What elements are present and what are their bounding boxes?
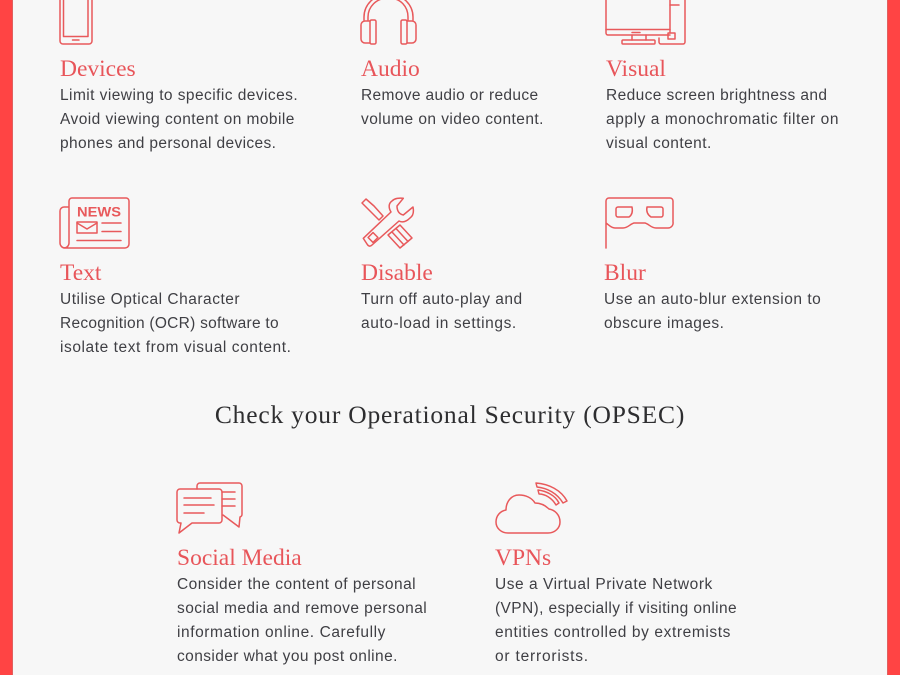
text: devices: phones and personal devices. xyxy=(60,134,276,152)
heading: disable: Disable xyxy=(361,260,433,286)
panel: devices xyxy=(59,0,298,152)
text: visual: apply a monochromatic filter on xyxy=(606,110,839,128)
text: devices: Limit viewing to specific devices. xyxy=(60,86,298,104)
text: visual xyxy=(606,86,839,152)
text: blur xyxy=(604,290,821,332)
text: visual: visual content. xyxy=(606,134,712,152)
icon: newspaper xyxy=(59,197,130,249)
heading: social media: Social Media xyxy=(177,545,302,571)
panel: social media xyxy=(176,482,427,664)
icon: newspaper: NEWS xyxy=(77,204,121,220)
text: text: Recognition (OCR) software to xyxy=(60,314,279,332)
text: VPNs: (VPN), especially if visiting online xyxy=(495,600,737,616)
text: VPNs: Use a Virtual Private Network xyxy=(495,576,713,592)
panel: blur xyxy=(604,197,821,332)
panel: disable xyxy=(361,197,523,332)
heading: blur: Blur xyxy=(604,260,646,286)
text: visual: Reduce screen brightness and xyxy=(606,86,827,104)
text: text: Utilise Optical Character xyxy=(60,290,240,308)
text: devices xyxy=(60,86,298,152)
right border xyxy=(887,0,900,675)
panel: VPNs xyxy=(495,482,737,664)
heading: visual: Visual xyxy=(606,56,666,82)
icon: mask xyxy=(605,197,674,249)
icon: wrench and screwdriver xyxy=(361,197,414,249)
text: audio xyxy=(361,86,544,128)
text: social media: Consider the content of personal xyxy=(177,576,416,592)
text: social media: information online. Carefully xyxy=(177,624,386,640)
text: disable: Turn off auto-play and xyxy=(361,290,523,308)
icon: cloud with signal xyxy=(495,482,568,534)
heading: audio: Audio xyxy=(361,56,420,82)
panel: audio xyxy=(360,0,544,128)
text: VPNs: or terrorists. xyxy=(495,648,589,664)
text: blur: Use an auto-blur extension to xyxy=(604,290,821,308)
text: VPNs: entities controlled by extremists xyxy=(495,624,731,640)
panel: text xyxy=(59,197,291,356)
text: text: isolate text from visual content. xyxy=(60,338,291,356)
text: text xyxy=(60,290,291,356)
heading: Check your Operational Security: Check your Operational Security (OPSEC) xyxy=(215,400,685,429)
text: disable: auto-load in settings. xyxy=(361,314,517,332)
heading: devices: Devices xyxy=(60,56,136,82)
icon: desktop computer xyxy=(605,0,686,45)
text: VPNs xyxy=(495,576,737,664)
text: social media: consider what you post online. xyxy=(177,648,398,664)
icon: speech bubbles xyxy=(176,482,243,534)
heading: text: Text xyxy=(60,260,101,286)
text: devices: Avoid viewing content on mobile xyxy=(60,110,295,128)
text: audio: volume on video content. xyxy=(361,110,544,128)
icon: phone xyxy=(59,0,93,45)
heading: VPNs: VPNs xyxy=(495,545,551,571)
text: blur: obscure images. xyxy=(604,314,724,332)
text: social media: social media and remove personal xyxy=(177,600,427,616)
text: social media xyxy=(177,576,427,664)
icon: headphones xyxy=(360,0,417,45)
text: disable xyxy=(361,290,523,332)
text: audio: Remove audio or reduce xyxy=(361,86,538,104)
panel: visual xyxy=(605,0,839,152)
left border xyxy=(0,0,13,675)
